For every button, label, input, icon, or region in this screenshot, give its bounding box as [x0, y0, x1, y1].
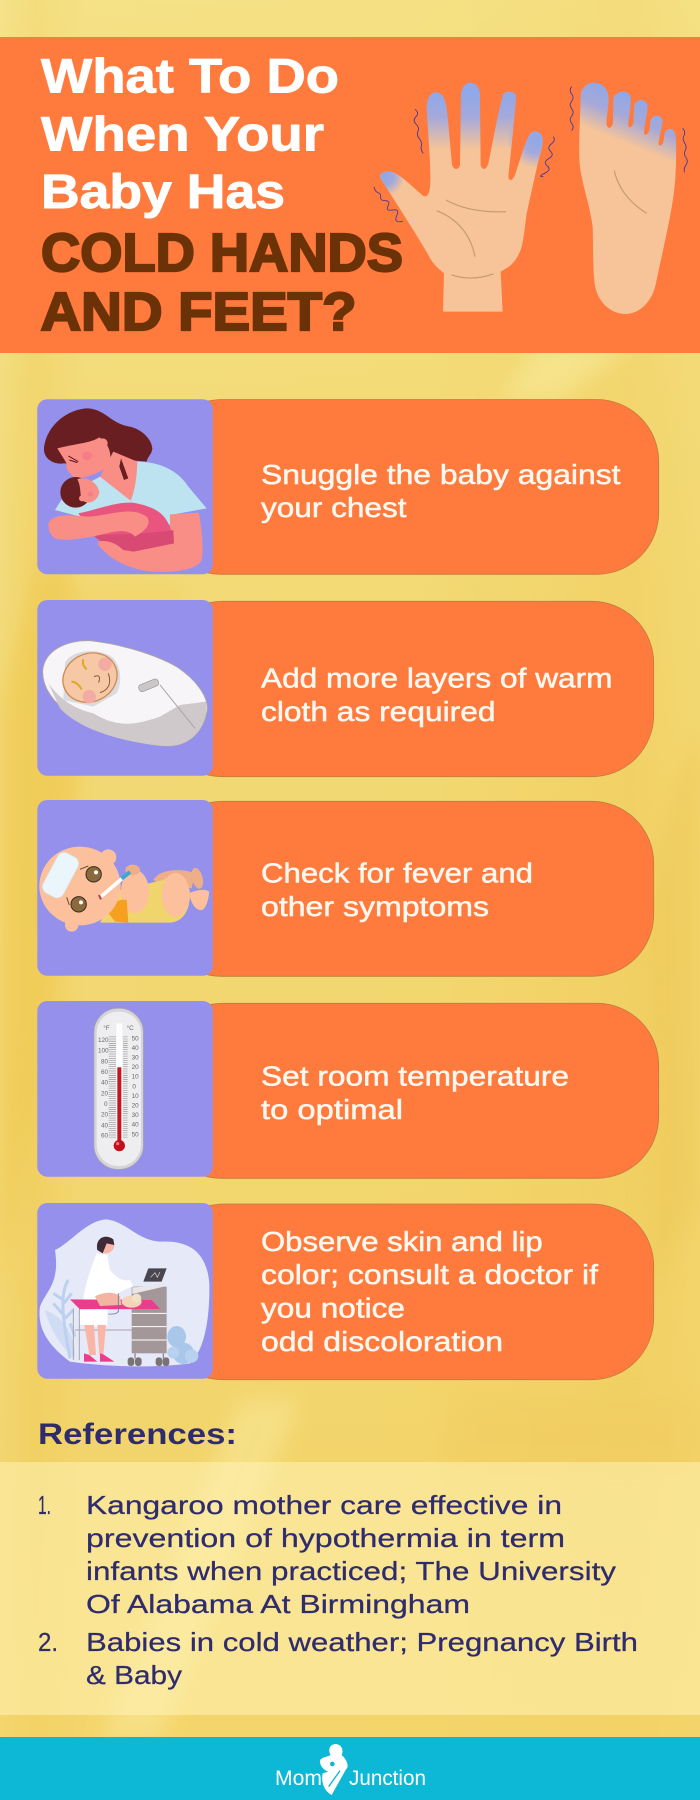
title — [40, 50, 403, 342]
step 4 icon tile: thermometer: 40 — [101, 1080, 109, 1087]
panel: step 2 warm layers — [37, 600, 654, 777]
step 5 text pill: color; consult a doctor if — [261, 1259, 598, 1290]
title: COLD HANDS — [41, 223, 403, 283]
step 4 icon tile: thermometer: 0 — [132, 1083, 136, 1090]
step 4 icon tile: thermometer: 20 — [101, 1112, 109, 1119]
step 2 text pill — [200, 601, 654, 777]
panel: step 1 snuggle — [37, 399, 659, 574]
step 4 icon tile: thermometer: 0 — [104, 1101, 108, 1108]
step 4 icon tile: thermometer: 60 — [101, 1133, 109, 1140]
title: What To Do — [41, 50, 339, 104]
step 4 icon tile: thermometer: 50 — [132, 1035, 139, 1042]
step 4 text pill: Set room temperature — [261, 1061, 569, 1092]
panel: step 5 observe skin color — [37, 1203, 654, 1380]
logo: MomJunction: Junction — [349, 1767, 426, 1790]
panel: references list: Kangaroo mother care effective in — [86, 1490, 562, 1520]
icon: cold hand — [374, 82, 555, 312]
step 4 icon tile: thermometer: °F — [103, 1024, 110, 1032]
step 5 icon tile: doctor examining baby — [37, 1203, 213, 1379]
step 4 icon tile: thermometer: 10 — [132, 1074, 139, 1081]
step 5 text pill: odd discoloration — [261, 1326, 503, 1357]
footer band with MomJunction logo — [0, 1737, 700, 1800]
step 4 text pill — [200, 1003, 659, 1178]
step 3 text pill — [200, 801, 654, 976]
title: AND FEET? — [40, 282, 356, 342]
panel: references list: 1. — [38, 1490, 51, 1520]
step 3 text pill: Check for fever and — [261, 858, 533, 889]
step 3 text pill: other symptoms — [261, 891, 489, 922]
panel: references list: prevention of hypothermia in term — [86, 1523, 565, 1553]
panel: references list: infants when practiced; The University — [86, 1556, 616, 1586]
step 2 text pill: Add more layers of warm — [261, 663, 612, 694]
step 4 icon tile: thermometer: 10 — [132, 1093, 139, 1100]
panel: references list: Of Alabama At Birmingham — [86, 1589, 470, 1619]
step 1 text pill: Snuggle the baby against — [261, 459, 621, 490]
step 4 icon tile: thermometer: 80 — [101, 1058, 109, 1065]
step 2 icon tile: swaddled baby — [37, 600, 213, 776]
panel: references list: & Baby — [86, 1660, 182, 1690]
step 4 icon tile: thermometer: 60 — [101, 1069, 109, 1076]
step 1 text pill: your chest — [261, 492, 407, 523]
references heading: References: — [38, 1418, 237, 1451]
panel: references list: 2. — [38, 1627, 58, 1657]
step 5 text pill: Observe skin and lip — [261, 1226, 543, 1257]
title: Baby Has — [41, 166, 285, 219]
step 2 text pill: cloth as required — [261, 696, 496, 727]
step 4 icon tile: thermometer — [37, 1001, 213, 1177]
step 4 text pill: to optimal — [261, 1094, 403, 1125]
header band — [0, 37, 700, 353]
panel: references list: Babies in cold weather; Pregnancy Birth — [86, 1627, 638, 1657]
step 4 icon tile: thermometer: 40 — [132, 1122, 139, 1129]
step 4 icon tile: thermometer: 100 — [98, 1048, 109, 1055]
step 4 icon tile: thermometer: 30 — [132, 1112, 139, 1119]
step 4 icon tile: thermometer: 30 — [132, 1055, 139, 1062]
title: When Your — [41, 109, 324, 162]
step 5 text pill: you notice — [261, 1293, 405, 1324]
step 4 icon tile: thermometer: °C — [127, 1024, 134, 1032]
step 1 text pill — [200, 400, 659, 574]
step 4 icon tile: thermometer: 40 — [101, 1122, 109, 1129]
icon: cold foot — [570, 83, 687, 314]
step 4 icon tile: thermometer: 50 — [132, 1131, 139, 1138]
panel: step 4 room temperature — [37, 1001, 659, 1178]
step 3 icon tile: baby with thermometer — [37, 800, 213, 976]
panel: references list — [0, 1462, 700, 1715]
panel: step 3 check fever — [37, 800, 654, 976]
step 1 icon tile: mother kissing baby — [37, 399, 213, 574]
step 4 icon tile: thermometer: 20 — [132, 1064, 139, 1071]
logo: MomJunction — [275, 1744, 426, 1795]
logo: MomJunction: Mom — [275, 1767, 322, 1790]
step 4 icon tile: thermometer: 20 — [101, 1090, 109, 1097]
step 4 icon tile: thermometer: 120 — [98, 1037, 109, 1044]
step 4 icon tile: thermometer: 20 — [132, 1102, 139, 1109]
step 4 icon tile: thermometer: 40 — [132, 1045, 139, 1052]
step 5 text pill — [200, 1204, 654, 1380]
